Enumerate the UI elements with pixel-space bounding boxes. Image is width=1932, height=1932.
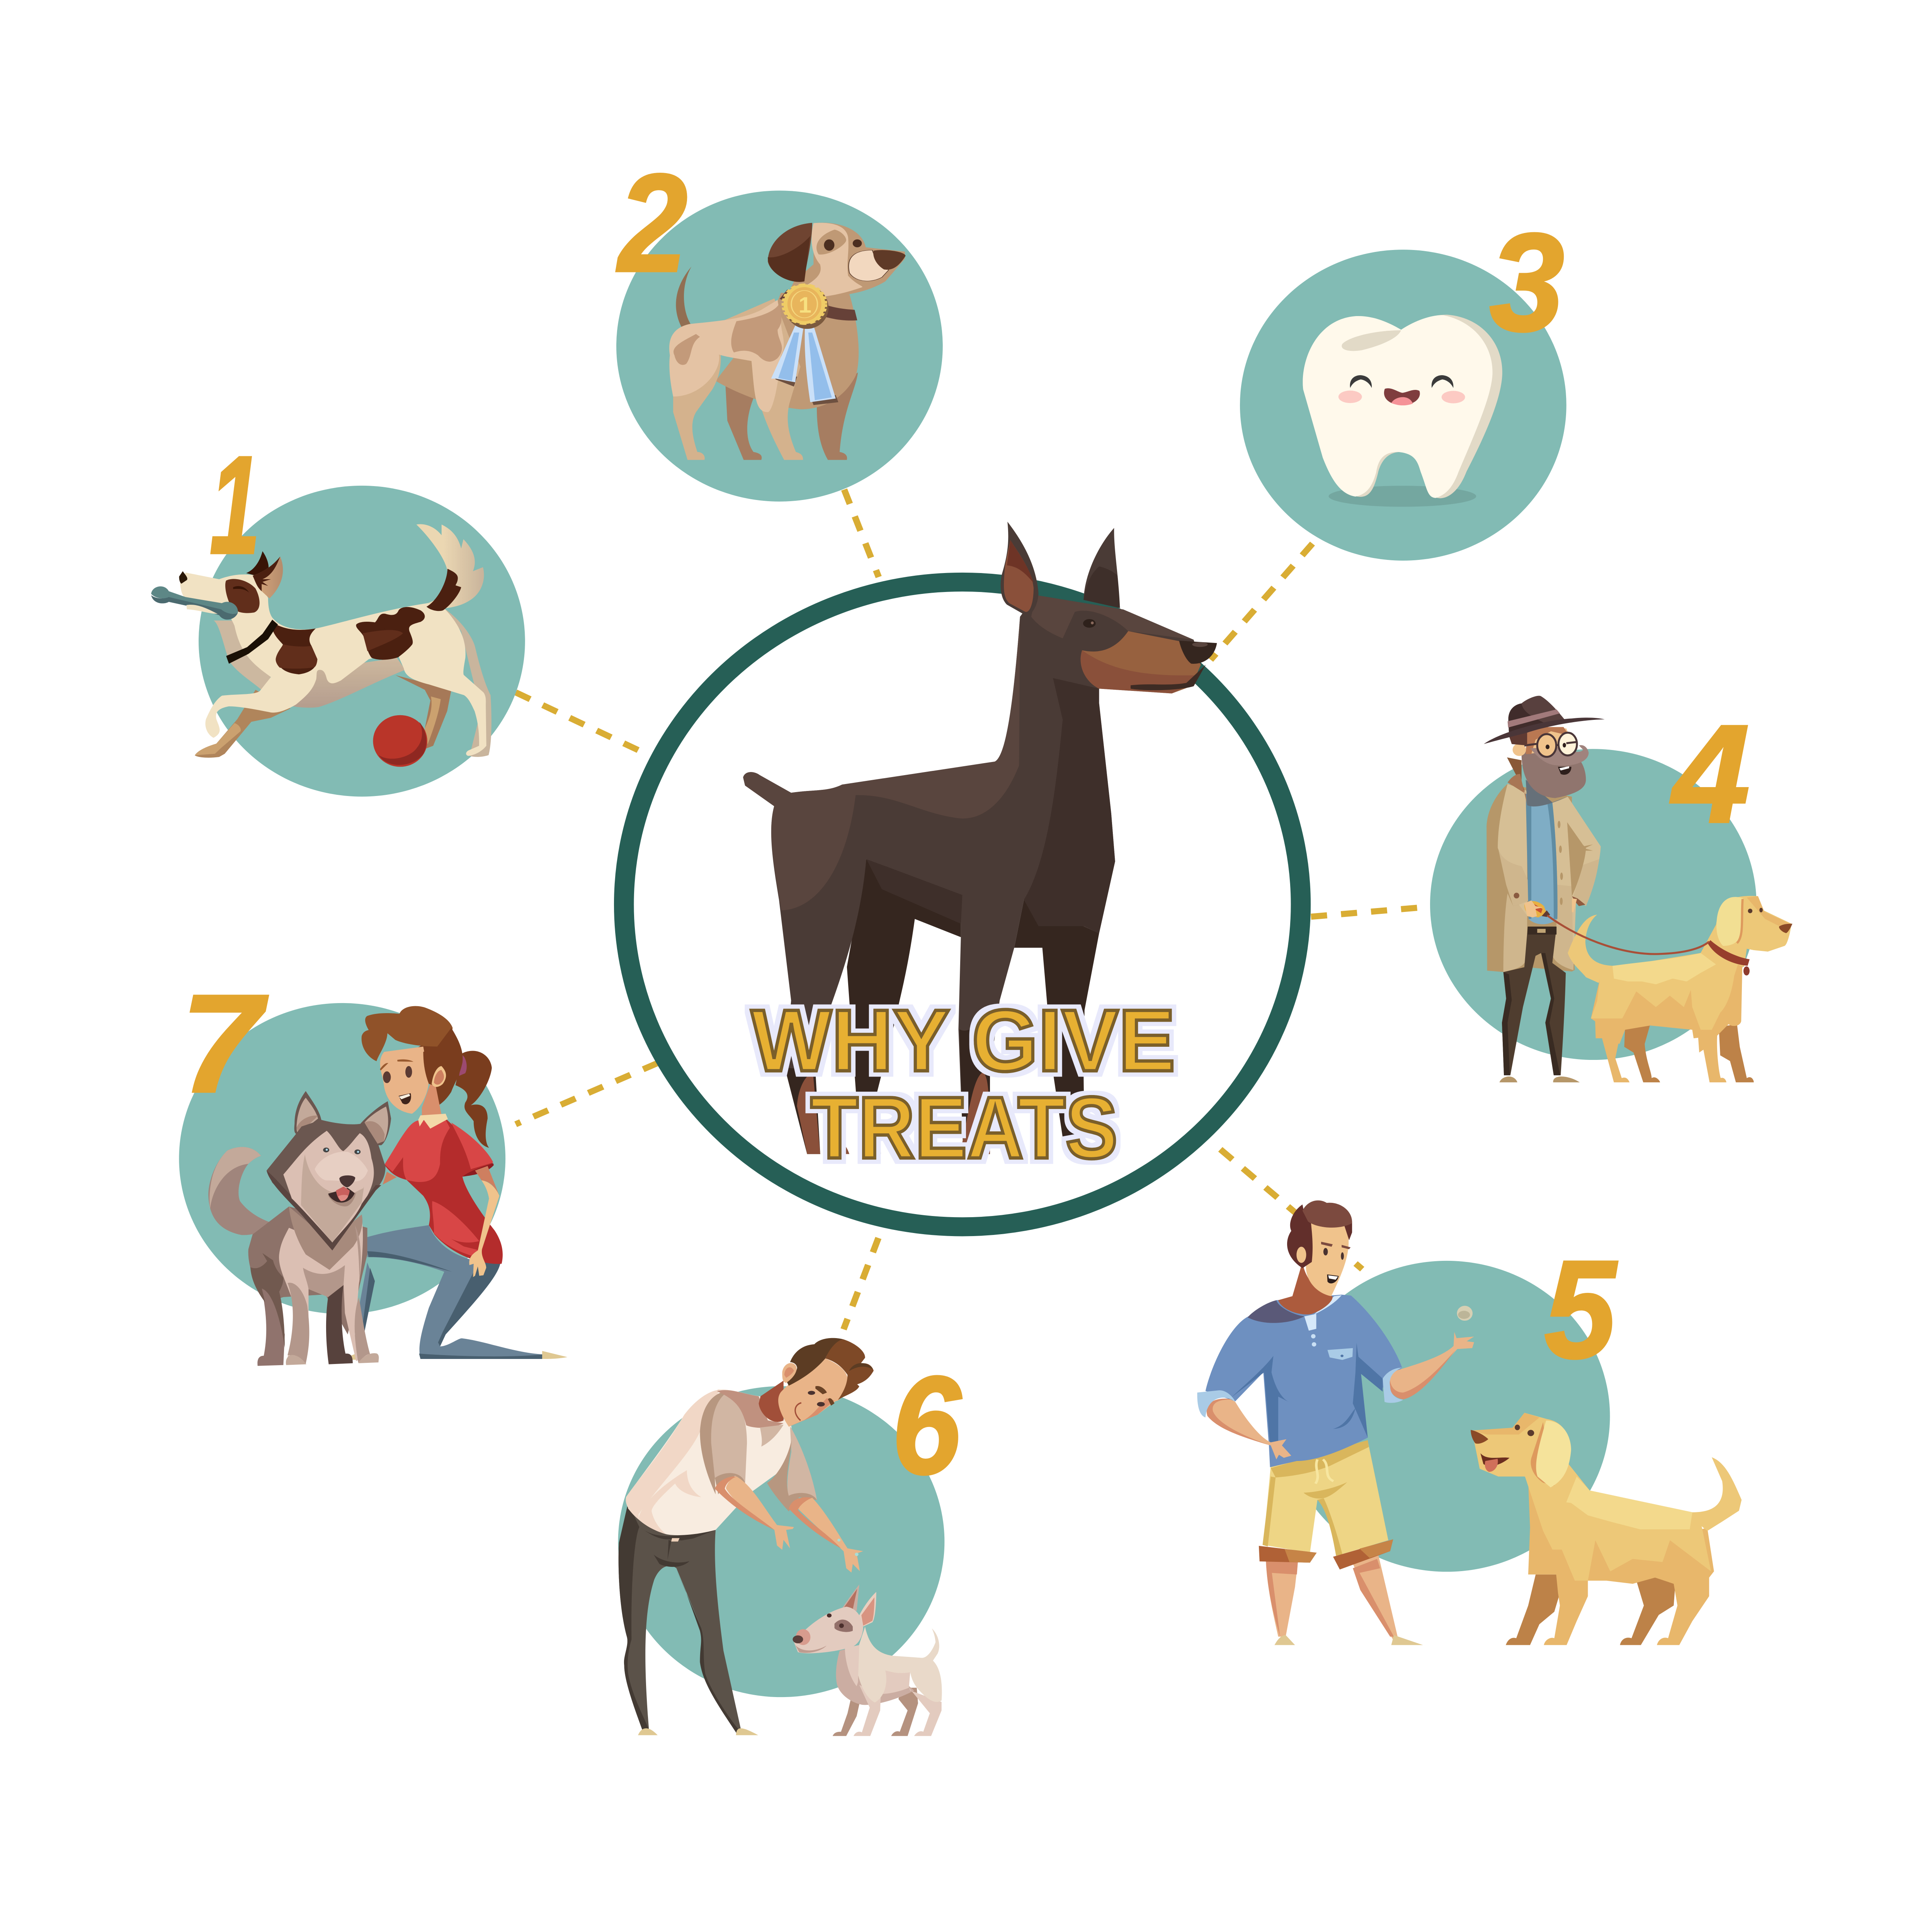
woman xyxy=(350,1006,567,1360)
illustration: man bending to bull terrier xyxy=(619,1338,942,1736)
title: WHY GIVE xyxy=(751,992,1175,1090)
teal circle xyxy=(199,486,525,797)
dashed connector: reason 3 xyxy=(1211,544,1313,660)
dashed connector: reason 5 xyxy=(1220,1149,1362,1269)
illustration: dog with medal xyxy=(669,223,906,460)
illustration: dog with medal: 1 xyxy=(799,293,811,318)
illustration: smiling tooth xyxy=(1303,315,1502,507)
dog xyxy=(793,1585,942,1736)
title xyxy=(751,992,1175,1177)
central ring xyxy=(624,582,1301,1227)
number 4: 4 xyxy=(1668,696,1750,852)
number 3: 3 xyxy=(1490,205,1564,361)
dog xyxy=(1568,896,1793,1082)
panel: reason 4, man walking dog xyxy=(1430,696,1793,1082)
dashed connector: reason 4 xyxy=(1311,907,1427,917)
title: TREATS xyxy=(811,1079,1118,1177)
number 7: 7 xyxy=(181,966,270,1121)
panel: reason 7, woman hugging husky xyxy=(179,966,567,1366)
illustration: kneeling woman with husky xyxy=(208,1006,567,1366)
dashed connector: reason 1 xyxy=(516,692,651,756)
number 5: 5 xyxy=(1544,1231,1619,1387)
teal circle xyxy=(1430,749,1757,1060)
dashed connector: reason 6 xyxy=(844,1238,878,1329)
dashed connector: reason 2 xyxy=(844,490,879,577)
illustration: bearded man with leashed golden dog xyxy=(1484,696,1793,1082)
teal circle xyxy=(616,190,943,502)
husky xyxy=(208,1091,391,1366)
teal circle xyxy=(1240,250,1566,561)
dog xyxy=(1471,1413,1742,1645)
panel: reason 1, playing dog xyxy=(151,428,525,797)
teal circle xyxy=(618,1386,944,1697)
ribbons xyxy=(771,325,838,405)
panel: central ring with doberman and title xyxy=(624,522,1301,1227)
teal circle xyxy=(1284,1261,1610,1572)
teal circle xyxy=(179,1003,505,1314)
number 1: 1 xyxy=(210,428,260,583)
panel: reason 6, man greeting small dog xyxy=(618,1338,962,1736)
number 2: 2 xyxy=(616,146,687,301)
panel: reason 2, champion dog xyxy=(616,146,943,502)
dashed connector: reason 7 xyxy=(516,1063,658,1124)
panel: reason 3, happy tooth xyxy=(1240,205,1566,561)
illustration: man throwing ball to golden dog xyxy=(1197,1201,1742,1645)
leash xyxy=(1547,915,1709,954)
illustration: doberman xyxy=(743,522,1217,1154)
number 6: 6 xyxy=(892,1348,962,1503)
panel: reason 5, man tossing ball to dog xyxy=(1197,1201,1742,1645)
illustration: playing dog with bone and ball xyxy=(151,524,492,767)
